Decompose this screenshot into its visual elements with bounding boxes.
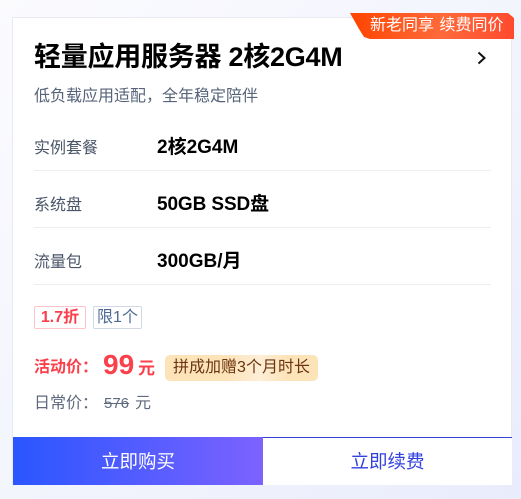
row: instance plan — [34, 136, 238, 158]
button: buy now: 立即购买 — [101, 451, 175, 472]
tag: discount — [34, 306, 86, 329]
row: system disk — [34, 194, 269, 215]
heading: 轻量应用服务器 2核2G4M — [34, 42, 343, 72]
button: renew — [263, 437, 512, 485]
tag: limit — [93, 306, 142, 329]
regular label: 日常价： — [34, 395, 98, 412]
price value: 99 — [103, 349, 134, 380]
price unit: 元 — [138, 359, 155, 378]
row: instance plan: 2核2G4M — [157, 137, 238, 158]
row: traffic package: 流量包 — [34, 254, 82, 271]
row: traffic package — [34, 251, 241, 272]
ribbon: promotion: 新老同享 续费同价 — [370, 17, 503, 34]
tag: discount: 1.7折 — [41, 309, 79, 326]
regular price — [34, 394, 151, 412]
regular value: 576 — [104, 395, 129, 412]
row: system disk: 系统盘 — [34, 197, 82, 214]
button: buy now — [13, 437, 263, 485]
row: system disk: 50GB SSD盘 — [157, 194, 269, 215]
badge: group bonus: 拼成加赠3个月时长 — [173, 359, 310, 376]
activity price — [34, 349, 155, 380]
ribbon: promotion — [350, 13, 514, 39]
icon: chevron — [478, 52, 486, 64]
price label: 活动价： — [34, 359, 98, 376]
subtitle: 低负载应用适配，全年稳定陪伴 — [34, 88, 258, 105]
button: renew: 立即续费 — [350, 451, 424, 472]
row: traffic package: 300GB/月 — [157, 251, 241, 272]
row: instance plan: 实例套餐 — [34, 140, 98, 157]
badge: group bonus — [165, 355, 318, 381]
tag: limit: 限1个 — [97, 309, 138, 326]
regular unit: 元 — [135, 395, 151, 412]
